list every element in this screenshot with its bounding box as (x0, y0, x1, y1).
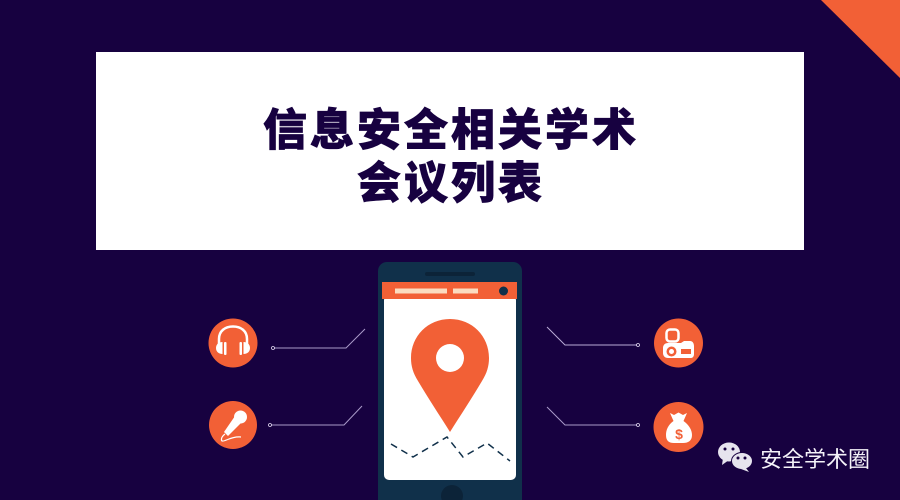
title: 信息安全相关学术 (263, 106, 639, 155)
corner triangle (821, 0, 900, 78)
phone illustration (378, 262, 522, 500)
title (263, 106, 639, 208)
connector: headphones (272, 329, 365, 350)
connector: money bag (547, 407, 640, 426)
icon: money bag: $ (675, 426, 683, 442)
connector: microphone (268, 406, 362, 426)
connector: camera (547, 327, 640, 346)
icon: camera (654, 318, 703, 368)
location pin (411, 319, 489, 432)
icon: money bag (654, 402, 704, 452)
dashed route (391, 437, 510, 461)
title: 会议列表 (357, 159, 545, 208)
watermark: WeChat account (718, 442, 870, 472)
watermark text: 安全学术圈 (760, 447, 870, 472)
icon: headphones (208, 318, 258, 368)
home button (441, 485, 463, 500)
icon: microphone (209, 401, 257, 449)
icon: WeChat logo (718, 442, 752, 472)
phone header bar (382, 282, 517, 299)
title panel (96, 52, 804, 250)
